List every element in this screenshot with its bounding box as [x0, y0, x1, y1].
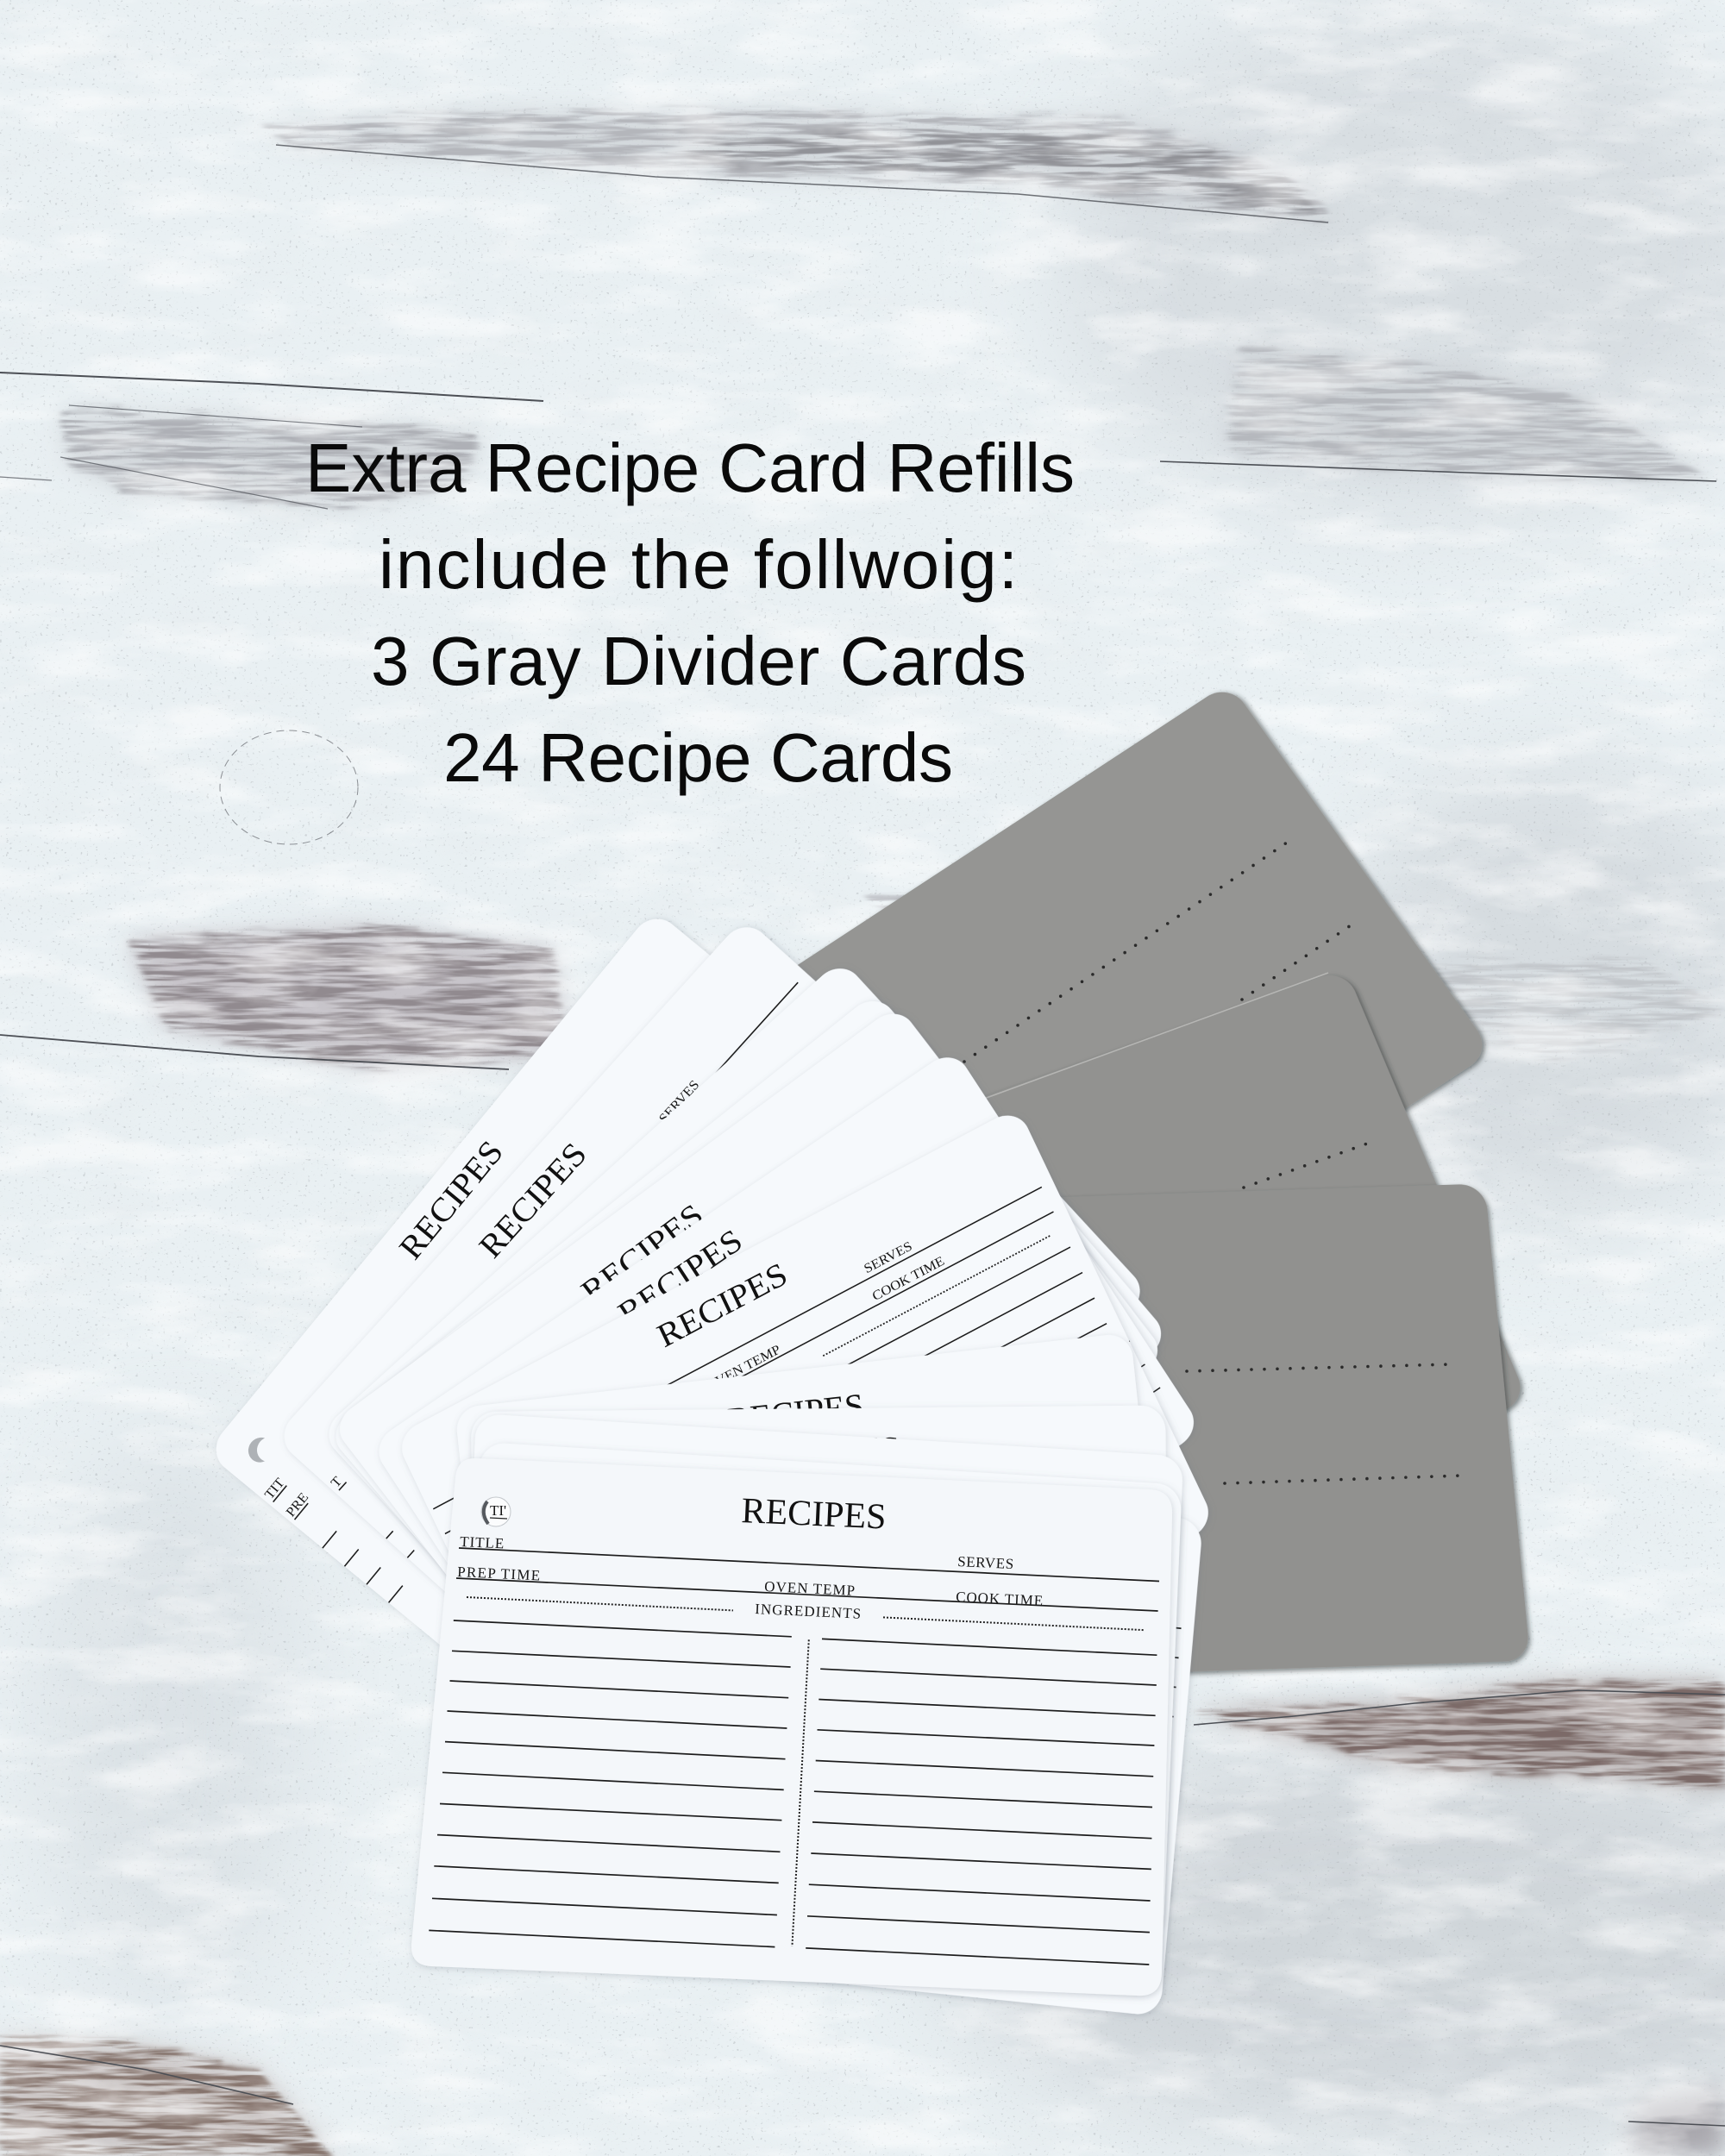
recipe card fan 5 [330, 1005, 1167, 1775]
recipe card fan 2: RECIPES [472, 1135, 594, 1265]
gray divider card 2 [671, 968, 1528, 1641]
recipe card fan 6 [370, 1048, 1203, 1827]
punched hole [481, 1497, 511, 1526]
recipe card fan 2: T [329, 1475, 345, 1490]
lower card stack 4 [455, 1413, 1183, 1940]
recipe card fan 7: RECIPES [652, 1256, 793, 1355]
left ruled lines [429, 1620, 792, 1947]
recipe card fan 5: RECIPES [574, 1197, 710, 1309]
field labels: TITLE [460, 1533, 505, 1551]
punched hole: TI' [490, 1502, 506, 1519]
dotted rules [467, 1597, 1145, 1946]
field labels: COOK TIME [956, 1589, 1044, 1609]
title text: 3 Gray Divider Cards [371, 623, 1026, 699]
recipe card fan 7: COOK TIME [870, 1254, 947, 1304]
field labels: INGREDIENTS [755, 1601, 862, 1622]
recipe card fan 6: RECIPES [612, 1222, 749, 1332]
title text [305, 429, 1075, 796]
lower card stack 2: RECIPES [760, 1429, 900, 1470]
lower card stack 3 [466, 1449, 1203, 2016]
title text: 24 Recipe Cards [443, 719, 953, 796]
right ruled lines [806, 1639, 1157, 1965]
title text: include the follwoig: [379, 526, 1018, 603]
recipe card fan 1 [206, 909, 1015, 1750]
lower card stack 1 [455, 1332, 1182, 1887]
recipe card fan 1: TIT [262, 1476, 287, 1502]
lower card stack 1: RECIPES [725, 1387, 866, 1439]
field labels: OVEN TEMP [764, 1578, 856, 1599]
field labels: SERVES [957, 1553, 1014, 1572]
lower card stack 5 [459, 1442, 1182, 1994]
gray divider card 1 [630, 682, 1492, 1444]
recipe card fan 3 [319, 959, 1150, 1767]
recipe card fan 2 [274, 918, 1092, 1751]
recipe card fan 7: SERVES [862, 1239, 914, 1276]
card body [411, 1458, 1172, 1996]
recipe card fan 4 [326, 992, 1171, 1778]
header rules [456, 1548, 1159, 1611]
front recipe card [411, 1458, 1172, 1996]
recipe card fan 1: RECIPES [392, 1133, 511, 1266]
gray divider card 3 [769, 1183, 1530, 1683]
field labels: PREP TIME [457, 1564, 541, 1584]
field labels [457, 1533, 1044, 1622]
heading: RECIPES [741, 1491, 887, 1538]
recipe card fan 7 [394, 1106, 1216, 1854]
lower card stack 2 [471, 1406, 1170, 1921]
recipe card fan 7: OVEN TEMP [705, 1343, 783, 1394]
title text: Extra Recipe Card Refills [305, 429, 1075, 506]
recipe card fan 2: SERVES [656, 1078, 702, 1126]
recipe card fan 1: PRE [284, 1490, 311, 1520]
